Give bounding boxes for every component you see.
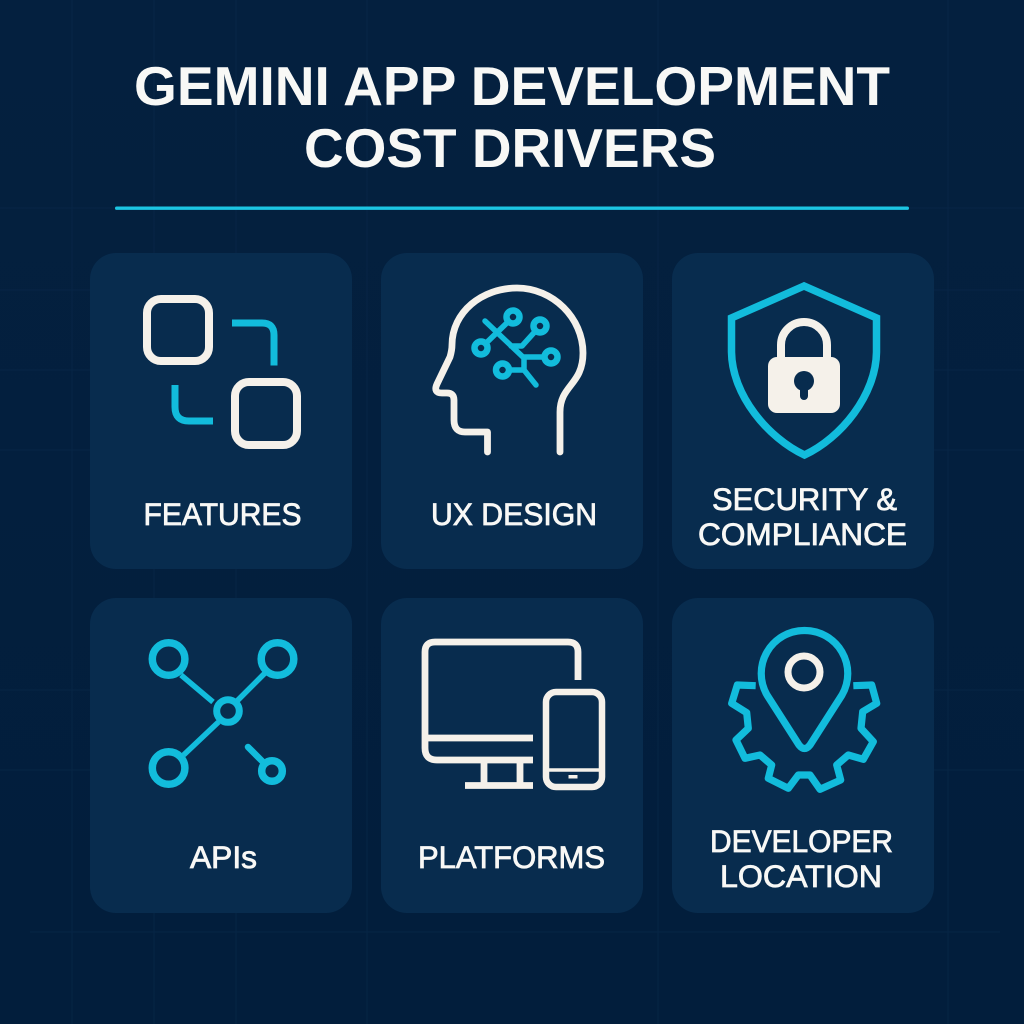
label: apis: APIs [190, 839, 257, 875]
title: GEMINI APP DEVELOPMENT [134, 55, 890, 117]
panel: apis [90, 598, 352, 913]
panel: developer location [672, 598, 934, 913]
label: developer location: LOCATION [720, 858, 882, 894]
label: features: FEATURES [144, 496, 302, 532]
icon: head with circuit brain [436, 288, 583, 452]
label: security and compliance [698, 481, 907, 552]
label: security and compliance: COMPLIANCE [698, 516, 907, 552]
label: developer location: DEVELOPER [710, 823, 893, 859]
icon: desktop monitor and phone [425, 642, 602, 787]
label: security and compliance: SECURITY & [712, 481, 897, 517]
label: developer location [710, 823, 893, 894]
label: ux design: UX DESIGN [431, 496, 597, 532]
panel: security and compliance [672, 253, 934, 569]
panel: features [90, 253, 352, 569]
icon: api node network [152, 643, 294, 784]
panel: ux design [381, 253, 643, 569]
icon: location pin with gear [732, 630, 877, 789]
label: platforms: PLATFORMS [418, 839, 605, 875]
panel: platforms [381, 598, 643, 913]
icon: shield with padlock [732, 286, 876, 455]
icon: connected squares [147, 299, 297, 445]
title: COST DRIVERS [304, 117, 716, 179]
title underline [115, 206, 909, 210]
title [134, 55, 890, 179]
